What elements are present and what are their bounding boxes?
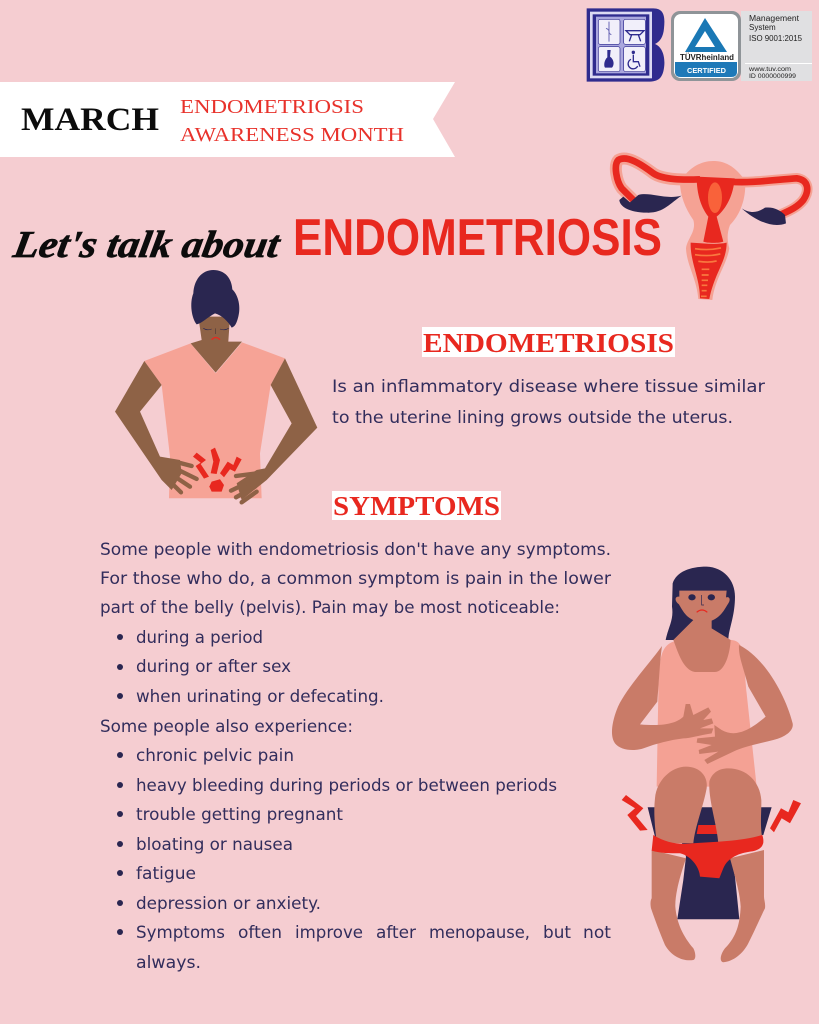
other symptoms list: trouble getting pregnant bbox=[136, 805, 344, 824]
definition text: Is an inflammatory disease where tissue similar bbox=[332, 377, 765, 396]
other symptoms list: Symptoms bbox=[136, 923, 225, 942]
title: let's talk about: Let's talk about bbox=[9, 224, 284, 266]
banner: awareness month text: ENDOMETRIOSIS bbox=[180, 96, 364, 118]
also experience line: Some people also experience: bbox=[100, 717, 353, 736]
symptoms intro: For those who do, a common symptom is pain in the lower bbox=[100, 569, 611, 588]
symptoms intro: part of the belly (pelvis). Pain may be most noticeable: bbox=[100, 598, 560, 617]
TÜV certification badge: CERTIFIED bbox=[687, 68, 726, 75]
illustration: uterus bbox=[616, 159, 807, 300]
other symptoms list: fatigue bbox=[136, 864, 196, 883]
TÜV certification badge bbox=[671, 11, 812, 81]
definition text bbox=[332, 377, 765, 427]
TÜV certification badge: System bbox=[749, 23, 776, 32]
other symptoms list: heavy bleeding during periods or between periods bbox=[136, 776, 557, 795]
banner ribbon bbox=[0, 82, 455, 157]
illustration: seated woman with pelvic pain bbox=[612, 567, 801, 962]
hospital logo bbox=[587, 8, 664, 82]
TÜV certification badge: TÜVRheinland bbox=[680, 53, 734, 62]
other symptoms list: depression or anxiety. bbox=[136, 894, 321, 913]
TÜV certification badge: ID 0000000999 bbox=[749, 73, 796, 80]
illustration: woman holding lower belly bbox=[115, 270, 317, 502]
TÜV certification badge: ISO 9001:2015 bbox=[749, 34, 803, 43]
heading: endometriosis: ENDOMETRIOSIS bbox=[423, 328, 674, 358]
other symptoms list: always. bbox=[136, 953, 201, 972]
other symptoms list: improve bbox=[295, 923, 363, 942]
other symptoms list: menopause, bbox=[429, 923, 530, 942]
other symptoms list: often bbox=[238, 923, 282, 942]
other symptoms list: not bbox=[583, 923, 612, 942]
other symptoms list bbox=[117, 746, 612, 972]
pain list: during or after sex bbox=[136, 657, 291, 676]
TÜV certification badge: Management bbox=[749, 14, 800, 23]
symptoms intro bbox=[100, 540, 611, 617]
pain list: during a period bbox=[136, 628, 263, 647]
banner: awareness month text bbox=[180, 96, 404, 146]
definition text: to the uterine lining grows outside the uterus. bbox=[332, 408, 733, 427]
banner: awareness month text: AWARENESS MONTH bbox=[180, 124, 404, 146]
heading: symptoms: SYMPTOMS bbox=[333, 491, 500, 521]
other symptoms list: but bbox=[543, 923, 572, 942]
other symptoms list: bloating or nausea bbox=[136, 835, 293, 854]
pain list: when urinating or defecating. bbox=[136, 687, 384, 706]
symptoms intro: Some people with endometriosis don't have any symptoms. bbox=[100, 540, 611, 559]
other symptoms list: chronic pelvic pain bbox=[136, 746, 294, 765]
title: endometriosis: ENDOMETRIOSIS bbox=[293, 209, 662, 267]
other symptoms list: after bbox=[376, 923, 416, 942]
pain list bbox=[117, 628, 384, 706]
TÜV certification badge: www.tuv.com bbox=[748, 66, 792, 73]
banner: March: MARCH bbox=[21, 102, 159, 138]
